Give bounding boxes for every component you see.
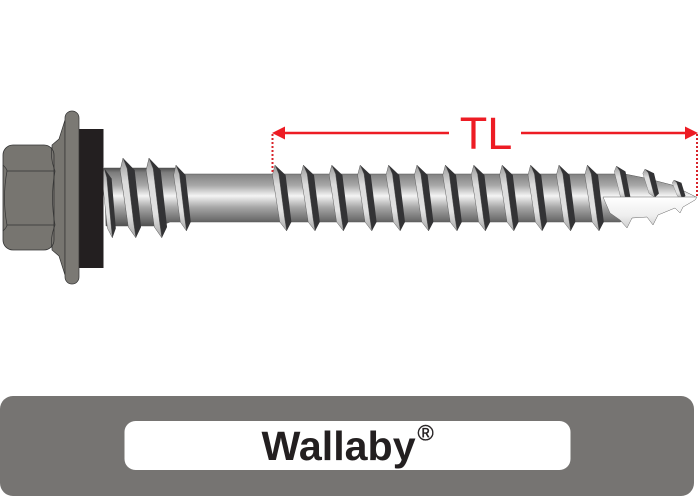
hex head [3, 145, 55, 250]
left dotted extension line [272, 134, 274, 172]
grey panel [0, 396, 694, 496]
right arrow [521, 126, 698, 140]
tip cut-away [603, 197, 697, 228]
screw [3, 111, 697, 284]
TL dimension [272, 108, 698, 197]
product name: Wallaby [262, 423, 416, 469]
right dotted extension line [696, 134, 698, 197]
white name plate [124, 421, 570, 470]
TL label: TL [460, 108, 512, 159]
black sealing washer [79, 129, 104, 268]
threads along body [272, 165, 604, 231]
name bar [0, 396, 694, 496]
screw shank [104, 168, 696, 226]
threads near head [102, 158, 191, 238]
registered mark: ® [418, 420, 434, 446]
hex head flange [52, 111, 79, 284]
left arrow [272, 126, 449, 140]
threads at tip [614, 166, 685, 202]
